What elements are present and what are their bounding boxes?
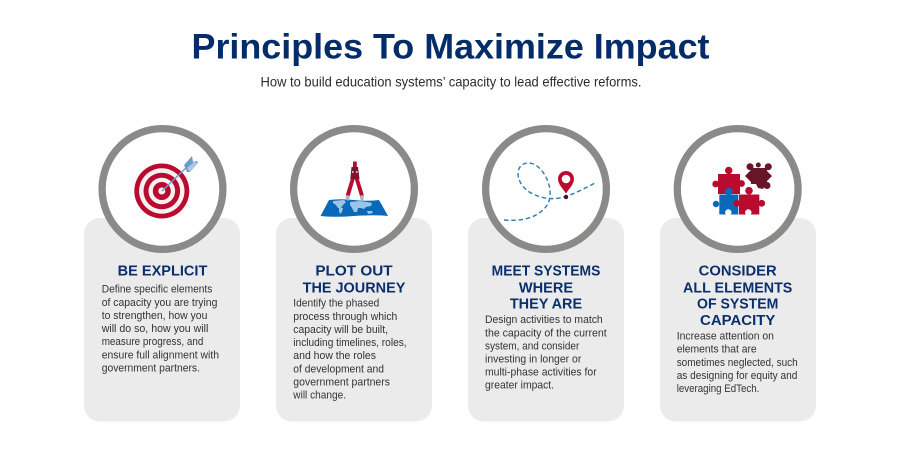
description [677, 331, 798, 395]
description: as designing for equity and [677, 370, 797, 382]
card background [276, 218, 432, 422]
description: Design activities to match [485, 314, 603, 326]
description: government partners [293, 376, 390, 388]
description: process through which [293, 311, 397, 323]
description: of capacity you are trying [102, 297, 217, 309]
description: government partners. [102, 362, 200, 374]
description: greater impact. [485, 380, 554, 392]
description: investing in longer or [485, 353, 582, 365]
description: the capacity of the current [485, 327, 607, 339]
icon ring [486, 129, 606, 249]
description: and how the roles [293, 350, 376, 362]
card background [660, 218, 816, 422]
heading [492, 264, 601, 313]
panel: meet systems where they are [468, 129, 624, 422]
description: will change. [292, 389, 346, 401]
card background [84, 218, 240, 422]
description: of development and [293, 363, 384, 375]
description: including timelines, roles, [293, 337, 407, 349]
icon ring [102, 129, 223, 249]
heading [303, 264, 406, 296]
panel: plot out the journey [276, 129, 432, 422]
panel: consider all elements of system capacity [660, 129, 816, 422]
description: ensure full alignment with [102, 349, 219, 361]
icon: target with arrow [134, 156, 198, 218]
description: Define specific elements [102, 284, 213, 296]
description [485, 314, 607, 392]
description: elements that are [677, 344, 757, 356]
heading: PLOT OUT [315, 264, 393, 280]
description: leveraging EdTech. [677, 383, 759, 395]
icon: puzzle pieces [712, 162, 772, 216]
description: multi-phase activities for [485, 367, 597, 379]
icon ring [677, 129, 798, 249]
icon ring [294, 129, 414, 249]
description: measure progress, and [102, 336, 203, 348]
panel: be explicit [84, 129, 240, 422]
card background [468, 218, 624, 422]
heading: CONSIDER [699, 264, 777, 280]
heading: THE JOURNEY [303, 280, 406, 296]
heading [683, 264, 793, 329]
description: system, and consider [485, 340, 580, 352]
icon: compass on map [320, 162, 388, 217]
title: Principles To Maximize Impact [192, 26, 710, 66]
description [101, 284, 219, 374]
heading: MEET SYSTEMS [492, 264, 601, 280]
heading: THEY ARE [510, 297, 582, 313]
heading: CAPACITY [700, 313, 776, 329]
description: to strengthen, how you [102, 310, 207, 322]
description [292, 298, 407, 401]
description: capacity will be built, [293, 324, 388, 336]
description: Identify the phased [293, 298, 379, 310]
description: sometimes neglected, such [677, 357, 798, 369]
subtitle: How to build education systems’ capacity to lead effective reforms. [260, 74, 642, 90]
heading: OF SYSTEM [697, 297, 778, 313]
description: Increase attention on [677, 331, 774, 343]
icon: dashed route with location pin [504, 163, 596, 220]
heading: WHERE [519, 280, 573, 296]
heading: BE EXPLICIT [118, 264, 207, 280]
description: will do so, how you will [101, 323, 208, 335]
heading: ALL ELEMENTS [683, 280, 793, 296]
